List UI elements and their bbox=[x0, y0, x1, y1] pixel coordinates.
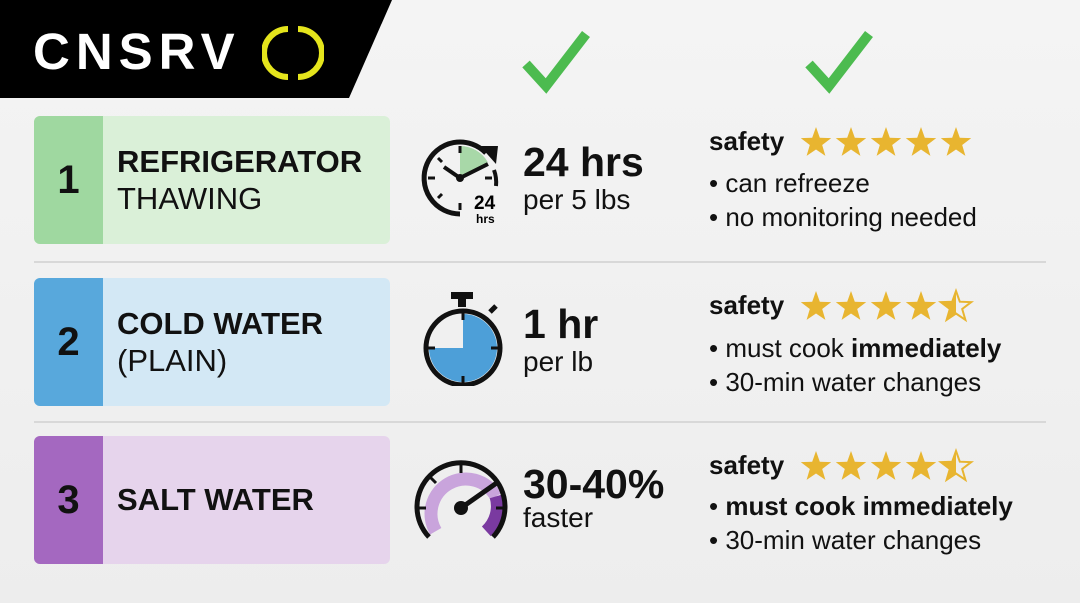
panel: refrigerator thawing bbox=[34, 116, 390, 244]
stat: 24 hrs: 24 hrs bbox=[523, 139, 644, 185]
bullets 3: • 30-min water changes bbox=[709, 525, 981, 555]
bullets 2: • must cook immediately bbox=[709, 333, 1001, 363]
safety rating 3 bbox=[709, 448, 974, 482]
safety rating 3: safety bbox=[709, 450, 784, 480]
safety rating 1: safety bbox=[709, 126, 784, 156]
stat: 24 hrs bbox=[523, 139, 644, 215]
stat: 30-40% bbox=[523, 461, 664, 533]
stat: 1 hr bbox=[523, 301, 598, 377]
panel: salt water: SALT WATER bbox=[117, 482, 314, 517]
stat: 24 hrs: per 5 lbs bbox=[523, 184, 630, 215]
panel: cold water: COLD WATER bbox=[117, 306, 323, 341]
brand name: CNSRV bbox=[33, 23, 241, 80]
bullets 1 bbox=[709, 168, 977, 232]
panel: refrigerator thawing: REFRIGERATOR bbox=[117, 144, 362, 179]
icon: clock 24 hrs bbox=[422, 140, 498, 226]
icon: speedometer bbox=[414, 460, 508, 539]
panel: cold water: 2 bbox=[57, 320, 80, 364]
stat: 30-40%: faster bbox=[523, 502, 593, 533]
bullets 1: • can refreeze bbox=[709, 168, 870, 198]
bullets 1: • no monitoring needed bbox=[709, 202, 977, 232]
icon: checkmark 2 bbox=[805, 31, 873, 94]
panel: salt water bbox=[34, 436, 390, 564]
safety rating 2: safety bbox=[709, 290, 784, 320]
bullets 2 bbox=[709, 333, 1002, 397]
bullets 3: • must cook immediately bbox=[709, 491, 1013, 521]
icon: clock 24 hrs: hrs bbox=[476, 212, 495, 226]
safety rating 1 bbox=[709, 126, 972, 156]
panel: cold water: (PLAIN) bbox=[117, 343, 227, 378]
icon: checkmark 1 bbox=[522, 31, 590, 94]
icon: clock 24 hrs: 24 bbox=[474, 193, 496, 214]
stat: 30-40%: 30-40% bbox=[523, 461, 664, 507]
safety rating 2 bbox=[709, 288, 974, 322]
icon: logo ring bbox=[262, 26, 324, 80]
panel: salt water: 3 bbox=[57, 478, 80, 522]
panel: refrigerator thawing: THAWING bbox=[117, 181, 262, 216]
icon: stopwatch bbox=[424, 292, 502, 386]
bullets 3 bbox=[709, 491, 1013, 555]
stat: 1 hr: per lb bbox=[523, 346, 593, 377]
stat: 1 hr: 1 hr bbox=[523, 301, 598, 347]
bullets 2: • 30-min water changes bbox=[709, 367, 981, 397]
header banner bbox=[0, 0, 392, 98]
panel: refrigerator thawing: 1 bbox=[57, 158, 80, 202]
panel: cold water bbox=[34, 278, 390, 406]
